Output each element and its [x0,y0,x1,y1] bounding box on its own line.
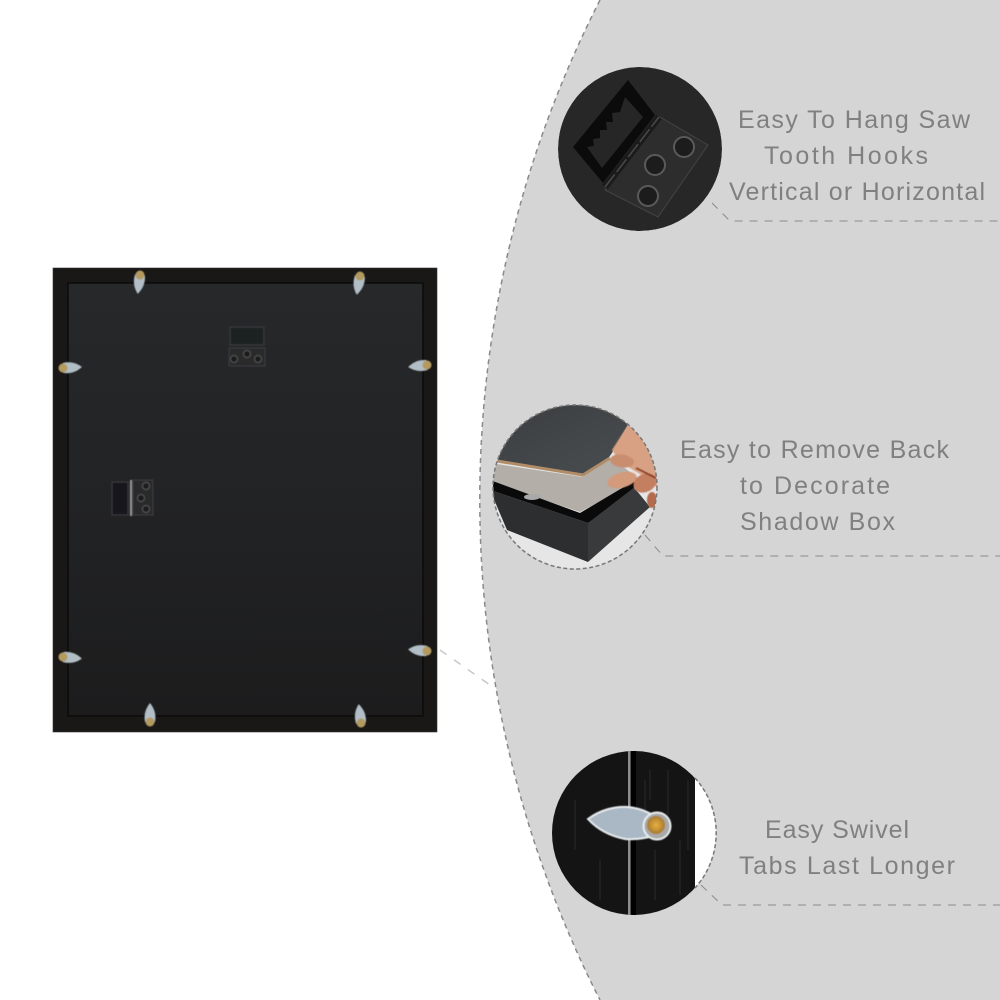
callout text: hooks [729,106,985,206]
hand [607,425,657,509]
silver lining [490,458,640,512]
callout text: back [680,436,950,536]
callout text: hooks: Tooth Hooks [764,142,928,170]
frame seam [628,750,630,920]
swivel tab [588,807,670,840]
top hanger hook [229,327,265,366]
grey curved panel [480,0,1000,1000]
saw tooth plate [573,80,655,183]
lifted backing board [497,405,628,474]
callout: saw tooth hook photo [558,67,722,231]
callout text: back: Shadow Box [740,508,896,536]
box right side [588,485,650,562]
callout text: hooks: Easy To Hang Saw [738,106,971,134]
hinge barrel [605,117,659,187]
callout text: back: Easy to Remove Back [680,436,950,464]
black rim [490,480,636,523]
dashed pointer from frame [440,650,490,685]
callout: removable back photo [490,400,662,569]
pointer: back [645,535,1000,556]
swivel tabs [58,270,432,728]
side hanger hook [112,480,153,516]
tan board edge [497,458,610,475]
callout text: back: to Decorate [740,472,890,500]
pointer: swivel [701,885,1000,905]
callout text: hooks: Vertical or Horizontal [729,178,985,206]
pointer: hooks [712,203,1000,221]
callout text: swivel: Easy Swivel [765,816,909,844]
hole plate [605,117,708,217]
dashed ring: removable back photo [493,405,657,569]
screw [647,816,665,834]
backing board [68,283,423,716]
shadow box back view [53,268,437,732]
silver clip [524,494,540,500]
box left side [490,490,588,562]
callout text: swivel: Tabs Last Longer [739,852,955,880]
frame [53,268,437,732]
callout text: swivel [739,816,955,880]
callout: swivel tab photo [550,750,716,920]
dashed ring: swivel tab photo [695,778,716,888]
wood grain [575,770,688,900]
